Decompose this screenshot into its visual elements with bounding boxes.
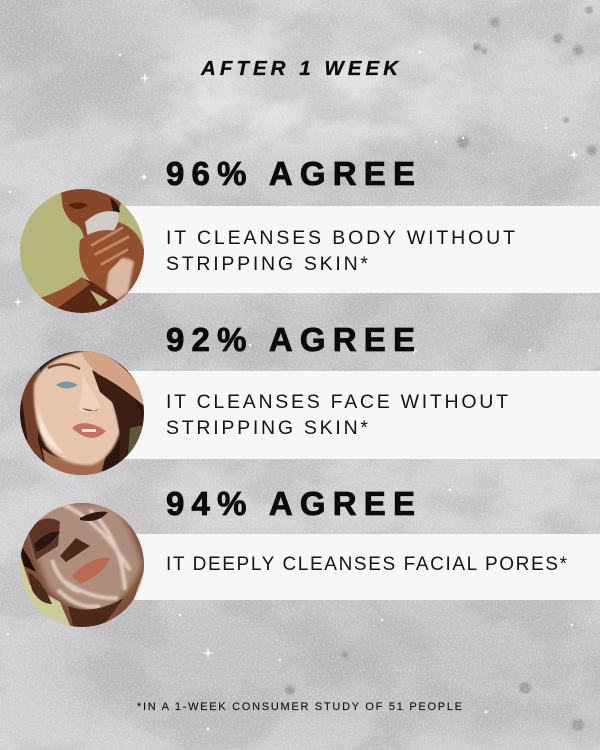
text block 2 <box>166 391 508 439</box>
white band 2 <box>120 371 600 459</box>
statistic heading 94%: 94% AGREE <box>166 485 415 522</box>
white band 1 <box>120 206 600 293</box>
text block 2: IT CLEANSES FACE WITHOUT <box>166 391 508 413</box>
panel: 92% agree <box>20 321 600 478</box>
shadow over eye <box>92 370 144 466</box>
hand <box>82 351 144 405</box>
photo: clay mask face <box>18 500 148 630</box>
face <box>34 351 120 465</box>
shoulder and torso <box>93 222 144 307</box>
hair and ear <box>22 368 44 462</box>
clay mask <box>30 503 142 612</box>
statistic heading 96%: 96% AGREE <box>166 155 415 192</box>
panel: 96% agree <box>20 155 600 316</box>
brow, eye, nose, mouth <box>48 364 80 369</box>
photo: body cleansing <box>20 186 146 316</box>
text block 2: STRIPPING SKIN* <box>166 417 368 439</box>
face and neck <box>60 186 121 238</box>
white band 3 <box>120 534 600 600</box>
dark foam spots <box>285 6 597 731</box>
title: AFTER 1 WEEK <box>200 57 400 80</box>
hair, ear, neck <box>21 548 36 572</box>
text block 1: STRIPPING SKIN* <box>166 253 368 275</box>
text block 1: IT CLEANSES BODY WITHOUT <box>166 227 515 249</box>
footnote: *IN A 1-WEEK CONSUMER STUDY OF 51 PEOPLE <box>137 701 462 713</box>
statistic heading 92%: 92% AGREE <box>166 321 415 358</box>
hand <box>79 230 122 283</box>
photo: face cleansing <box>20 351 144 478</box>
neck <box>42 448 106 478</box>
panel: 94% agree <box>18 485 600 630</box>
forearm and lower body <box>41 278 118 313</box>
eyes, nose, lips <box>28 518 60 560</box>
text block 3: IT DEEPLY CLEANSES FACIAL PORES* <box>166 554 568 575</box>
text block 1 <box>166 227 515 275</box>
sponge <box>85 211 119 235</box>
